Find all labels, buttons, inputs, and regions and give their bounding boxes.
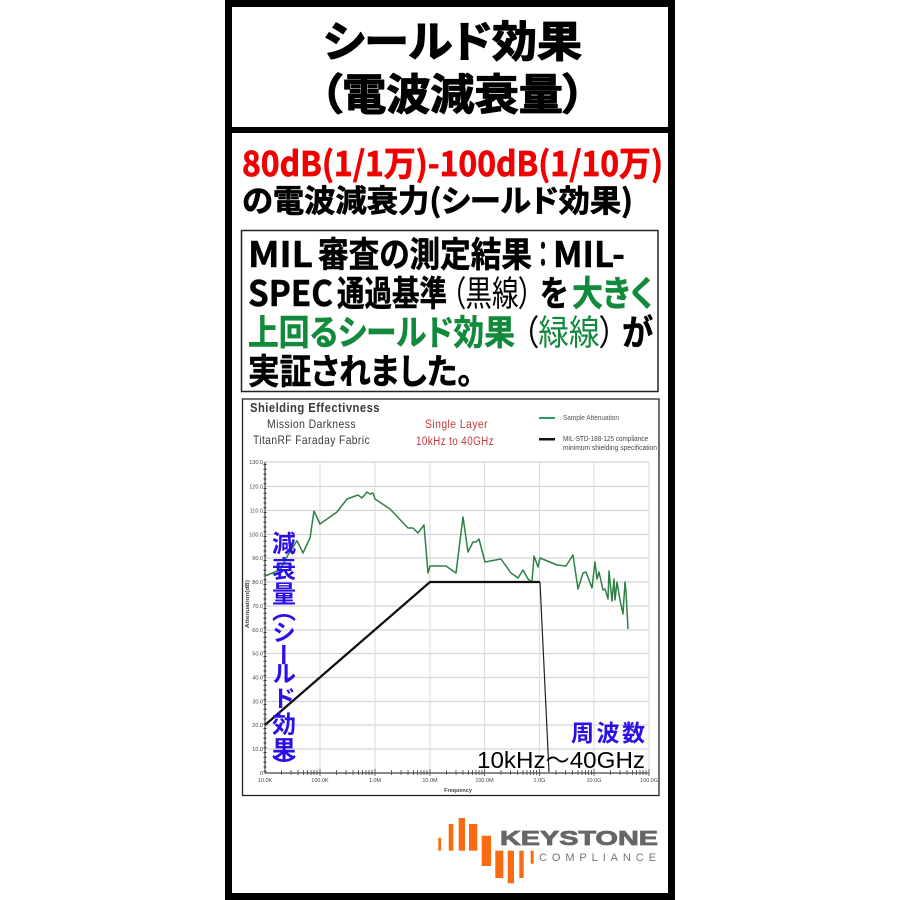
y axis annotation [266,531,302,778]
panel: MIL test result text: MIL [248,227,313,278]
subtitle: attenuation range [242,137,663,221]
panel: MIL test result text: （黒線） [452,266,532,317]
chart axes: 0 [260,771,263,777]
panel: MIL test result text: SPEC [248,266,333,317]
chart axes: 10.0G [587,778,601,784]
chart axes: 100.0M [475,778,494,784]
panel: MIL test result text: が [622,305,653,356]
chart axes: 40.0 [252,676,263,682]
panel: chart [242,399,659,796]
subtitle: attenuation range: 80dB(1/1万)-100dB(1/10万) [242,137,663,186]
chart axes: 1.0G [534,778,545,784]
chart axes: 120.0 [249,484,263,490]
chart axes: 20.0 [252,723,263,729]
y axis annotation: 果 [266,736,302,761]
frequency annotation: 10kHz～40GHz [477,747,645,773]
logo: Keystone Compliance [438,818,658,883]
title: シールド効果 [323,8,582,70]
chart axes: 80.0 [252,580,263,586]
panel: MIL test result text [242,227,658,395]
title: （電波減衰量） [320,61,585,123]
y axis annotation: 量 [266,582,302,606]
chart axes: 100.0G [640,778,658,784]
chart axes: 100.0K [311,778,329,784]
y axis annotation: ー [266,643,302,667]
panel: MIL test result text: 通過基準 [337,266,447,317]
y axis annotation: 衰 [266,556,302,581]
icon: orange sound-wave bars [438,818,534,883]
chart axes: 60.0 [252,628,263,634]
y axis annotation: ） [266,754,302,778]
chart axes: 100.0 [249,532,263,538]
panel: MIL test result text: ： [538,227,548,278]
chart axes: 110.0 [250,508,263,514]
black line: MIL-STD minimum specification [265,582,540,725]
y axis annotation: 効 [266,712,302,736]
panel: MIL test result text: MIL- [553,227,625,278]
y axis annotation: 減 [266,531,302,555]
panel: MIL test result text: 審査の測定結果 [318,227,532,278]
panel: MIL test result text: を [540,266,568,317]
chart axes: 90.0 [252,556,263,562]
chart axes: Frequency [444,788,473,794]
frequency annotation: 周波数 [571,714,645,748]
frequency annotation [477,714,645,773]
chart axes: 10.0K [258,778,273,784]
logo: Keystone Compliance: KEYSTONE [500,828,658,850]
chart axes: 50.0 [252,652,263,658]
subtitle: attenuation range: の電波減衰力(シールド効果) [242,176,633,221]
panel: MIL test result text: （緑線） [523,305,615,356]
chart axes: Attenuation(dB) [245,580,251,628]
panel: MIL test result text: 大きく [572,266,653,317]
chart heading: Mission Darkness [267,417,356,431]
chart axes: 10.0 [252,747,263,753]
chart subtitle [416,417,494,448]
green line: sample attenuation [265,492,628,629]
logo: Keystone Compliance: COMPLIANCE [539,852,656,864]
chart subtitle: 10kHz to 40GHz [416,436,494,448]
title [320,8,585,123]
chart axes [245,460,658,794]
chart subtitle: Single Layer [425,417,488,431]
chart legend [539,415,657,452]
y axis annotation: （ [266,598,302,622]
chart heading: TitanRF Faraday Fabric [253,433,370,447]
panel: MIL test result text: 上回るシールド効果 [248,305,515,356]
chart heading: Shielding Effectivness [250,401,380,415]
chart axes: 130.0 [249,460,263,466]
chart axes: 70.0 [252,604,263,610]
panel: MIL test result text: 実証されました。 [248,344,473,395]
y axis annotation: ド [266,686,302,710]
chart axes: 1.0M [369,778,382,784]
chart legend: minimum shielding specification [563,445,657,452]
chart legend: MIL-STD-188-125 compliance [563,436,648,443]
chart axes: 10.0M [422,778,438,784]
y axis annotation: ル [266,661,302,685]
chart heading [250,401,380,447]
chart legend: Sample Attenuation [563,415,619,422]
chart axes: 30.0 [252,700,263,706]
y axis annotation: シ [266,620,302,644]
